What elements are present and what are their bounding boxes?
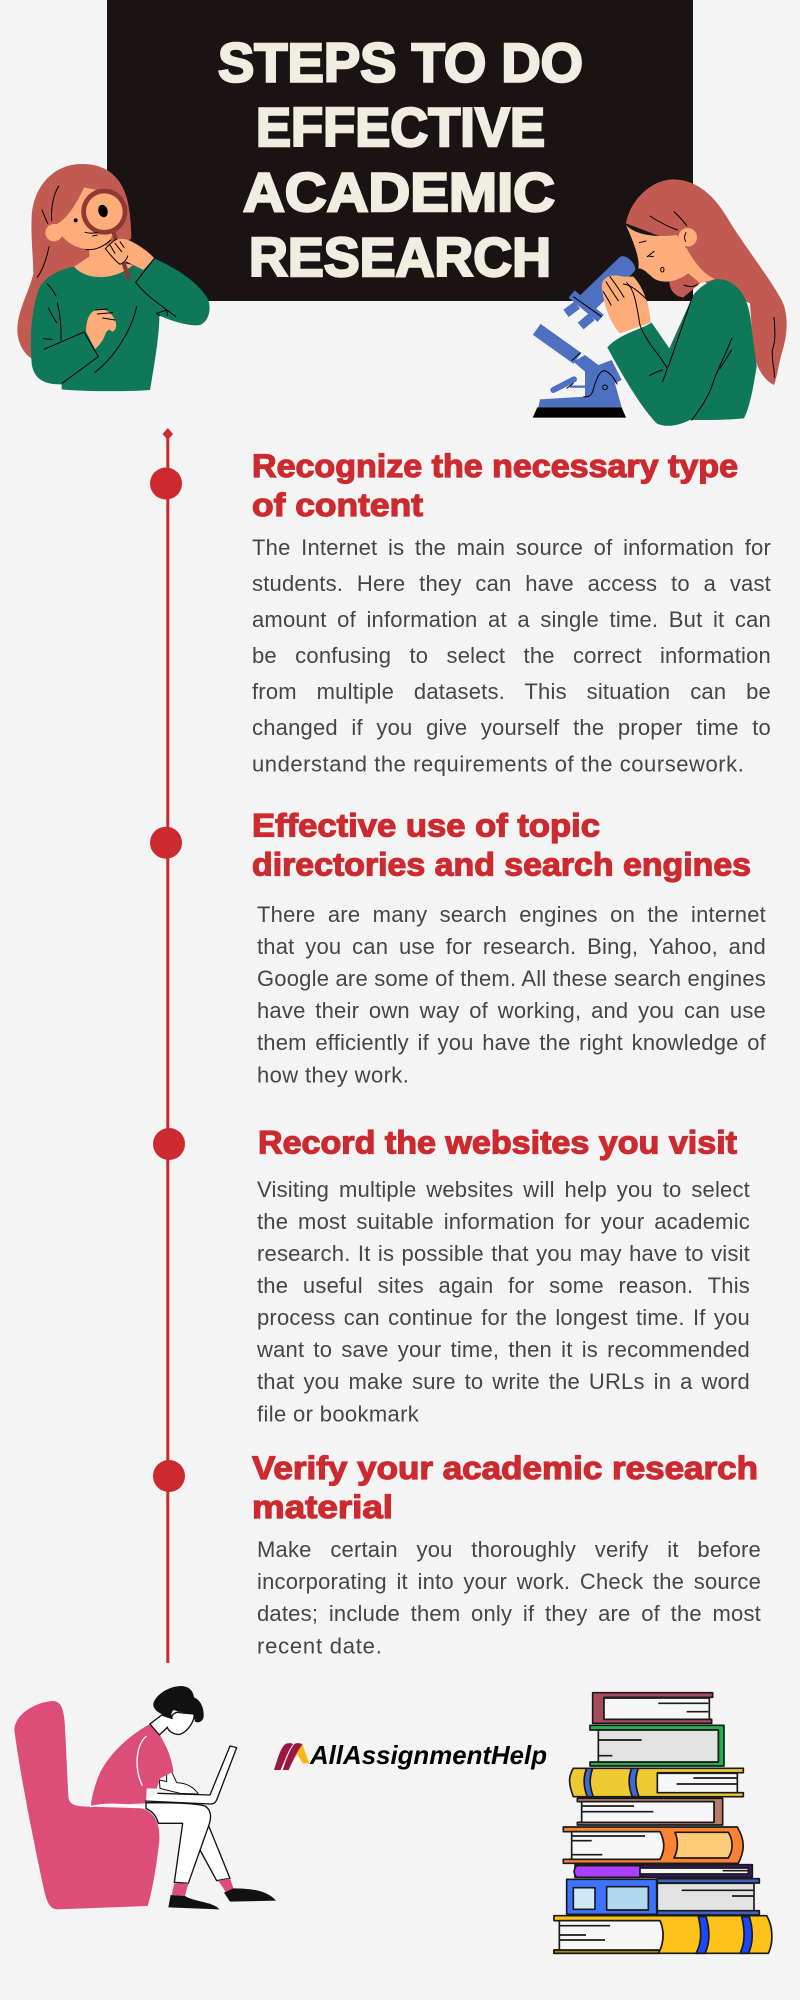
- timeline start diamond: [162, 428, 173, 440]
- body text: step 1: amount of information at a single time. But it can: [252, 607, 771, 632]
- title text: ACADEMIC: [243, 161, 555, 223]
- body text: step 3: file or bookmark: [257, 1401, 420, 1426]
- timeline node 1: [150, 468, 182, 500]
- heading: step 1: Recognize the necessary type: [252, 448, 738, 484]
- illustration: girl with magnifying glass: [17, 164, 210, 391]
- body text: step 2: how they work.: [257, 1062, 409, 1087]
- illustration: person on armchair with laptop: [14, 1686, 276, 1909]
- title text: EFFECTIVE: [256, 96, 545, 158]
- body text: step 3: want to save your time, then it is recommended: [257, 1337, 750, 1362]
- timeline node 2: [150, 827, 182, 859]
- heading: step 2: [252, 808, 751, 883]
- title banner: [107, 0, 693, 301]
- heading: step 3: Record the websites you visit: [258, 1125, 737, 1161]
- body text: step 1: from multiple datasets. This situation can be: [252, 679, 771, 704]
- heading: step 1: [252, 448, 738, 523]
- body text: step 2: Google are some of them. All these search engines: [257, 966, 766, 991]
- book 5: [563, 1827, 743, 1863]
- title text: STEPS TO DO: [218, 32, 583, 94]
- body text: step 3: Visiting multiple websites will help you to select: [257, 1177, 750, 1202]
- body text: step 3: the most suitable information for your academic: [257, 1209, 750, 1234]
- timeline node 4: [153, 1460, 185, 1492]
- book 4: [577, 1798, 723, 1825]
- body text: step 4: recent date.: [257, 1633, 382, 1658]
- title text: RESEARCH: [249, 226, 551, 288]
- body text: step 1: be confusing to select the correct information: [252, 643, 771, 668]
- body text: step 2: that you can use for research. Bing, Yahoo, and: [257, 934, 766, 959]
- body text: step 4: dates; include them only if they are of the most: [257, 1601, 761, 1626]
- body text: step 4: [257, 1537, 761, 1658]
- body text: step 2: them efficiently if you have the right knowledge of: [257, 1030, 766, 1055]
- heading: step 1: of content: [252, 487, 423, 523]
- body text: step 1: The Internet is the main source of information for: [252, 535, 771, 560]
- body text: step 3: research. It is possible that you may have to visit: [257, 1241, 750, 1266]
- book 1: [593, 1693, 713, 1723]
- body text: step 3: [257, 1177, 750, 1426]
- body text: step 3: that you make sure to write the URLs in a word: [257, 1369, 750, 1394]
- heading: step 2: Effective use of topic: [252, 808, 600, 844]
- body text: step 1: [252, 535, 771, 776]
- body text: step 2: There are many search engines on the internet: [257, 902, 766, 927]
- title text: [218, 32, 583, 288]
- heading: step 4: material: [252, 1489, 393, 1525]
- microscope: [533, 253, 638, 418]
- logo wordmark: AllAssignmentHelp: [309, 1740, 547, 1770]
- body text: step 4: Make certain you thoroughly verify it before: [257, 1537, 761, 1562]
- heading: step 4: Verify your academic research: [252, 1450, 758, 1486]
- book 7: [567, 1879, 759, 1915]
- book 6: [574, 1865, 752, 1877]
- book 2: [590, 1725, 724, 1766]
- timeline: [150, 428, 185, 1663]
- heading: step 2: directories and search engines: [252, 847, 751, 883]
- body text: step 2: have their own way of working, and you can use: [257, 998, 766, 1023]
- logo mark: [274, 1743, 309, 1770]
- body text: step 1: students. Here they can have access to a vast: [252, 571, 771, 596]
- timeline node 3: [153, 1128, 185, 1160]
- illustration: stack of books: [554, 1693, 772, 1953]
- body text: step 1: understand the requirements of the coursework.: [252, 751, 744, 776]
- book 8: [554, 1916, 772, 1953]
- body text: step 3: the useful sites again for some reason. This: [257, 1273, 750, 1298]
- body text: step 3: process can continue for the longest time. If you: [257, 1305, 750, 1330]
- heading: step 4: [252, 1450, 758, 1525]
- book 3: [570, 1768, 743, 1797]
- body text: step 2: [257, 902, 766, 1087]
- logo: AllAssignmentHelp: [274, 1740, 547, 1770]
- body text: step 1: changed if you give yourself the proper time to: [252, 715, 771, 740]
- body text: step 4: incorporating it into your work. Check the source: [257, 1569, 761, 1594]
- illustration: girl with microscope: [533, 179, 787, 426]
